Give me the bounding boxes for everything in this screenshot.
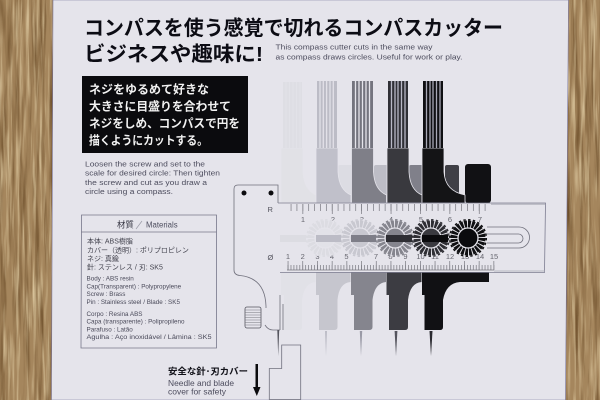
instruction box xyxy=(82,76,248,153)
ruler diameter scale: 10 xyxy=(416,252,425,261)
english instructions: scale for desired circle: Then tighten xyxy=(85,168,220,178)
ruler diameter scale: 14 xyxy=(476,252,484,261)
slot bar xyxy=(280,235,316,242)
english instructions xyxy=(85,160,220,196)
english tagline xyxy=(276,42,462,62)
panel: materials: Pin : Stainless steel / Blade : SK5 xyxy=(86,299,180,306)
panel: materials: Screw : Brass xyxy=(86,291,125,298)
screw holes xyxy=(242,190,274,196)
ruler diameter scale: 15 xyxy=(490,252,498,261)
panel: materials: Materials xyxy=(146,220,178,230)
english instructions: the screw and cut as you draw a xyxy=(85,178,208,187)
ruler R scale: 2 xyxy=(331,215,335,224)
english instructions: circle using a compass. xyxy=(85,187,173,196)
ruler R scale: 5 xyxy=(419,215,423,224)
panel: materials: Body : ABS resin xyxy=(86,275,134,282)
panel: materials: Corpo : Resina ABS xyxy=(86,311,143,318)
top silhouettes: cutter upper body fading xyxy=(281,81,491,203)
behind tabs xyxy=(338,164,491,203)
ruler R scale: R xyxy=(268,205,274,214)
title xyxy=(84,16,503,66)
ruler diameter scale: 1 xyxy=(286,252,290,261)
ruler diameter scale: 4 xyxy=(330,252,334,261)
wheel stage 5 xyxy=(449,219,487,257)
ruler diameter scale: 3 xyxy=(315,252,319,261)
wheel stage 3 xyxy=(376,219,422,257)
title: ビジネスや趣味に! xyxy=(84,43,263,66)
ruler diameter scale: 12 xyxy=(446,252,454,261)
panel: materials: 材質 xyxy=(117,220,134,230)
ruler R scale: 1 xyxy=(301,215,305,224)
panel: materials: ネジ: 真鍮 xyxy=(87,254,119,263)
panel: materials xyxy=(81,215,216,348)
title: コンパスを使う感覚で切れるコンパスカッター xyxy=(84,16,503,40)
wheel stage 4 xyxy=(412,219,450,257)
ruler R scale: 3 xyxy=(360,215,364,224)
english instructions: Loosen the screw and set to the xyxy=(85,160,205,168)
safety cover outline xyxy=(269,345,301,400)
safety cover label xyxy=(168,366,248,396)
ruler diameter scale: 5 xyxy=(344,252,349,261)
bottom silhouettes: cutter lower body fading xyxy=(281,272,489,330)
ruler R scale: 7 xyxy=(478,215,482,224)
english tagline: This compass cutter cuts in the same way xyxy=(276,42,433,52)
ruler diameter scale: 8 xyxy=(388,252,393,261)
panel: materials: 針: ステンレス / 刃: SK5 xyxy=(87,262,163,272)
wheel stage 2 xyxy=(341,219,386,257)
ruler diameter scale: 11 xyxy=(431,252,439,261)
compass outline xyxy=(234,185,546,330)
safety cover label: cover for safety xyxy=(168,388,226,396)
ruler R scale xyxy=(268,205,487,224)
knob screw xyxy=(245,307,261,328)
safety cover label: 安全な針･刃カバー xyxy=(168,366,248,376)
ruler diameter scale: 9 xyxy=(403,252,408,261)
needles xyxy=(325,331,432,356)
instruction box: ネジをゆるめて好きな xyxy=(89,82,209,96)
needle pin xyxy=(277,330,279,356)
ruler R scale: 4 xyxy=(389,215,393,224)
safety cover label: Needle and blade xyxy=(168,379,235,388)
rule highlight lines xyxy=(491,204,545,271)
panel: materials: Parafuso : Latão xyxy=(86,326,133,333)
panel: materials: カバー（透明）: ポリプロピレン xyxy=(87,246,189,254)
ruler diameter scale: 7 xyxy=(374,252,378,261)
stages xyxy=(281,148,465,203)
english tagline: as compass draws circles. Useful for work or play. xyxy=(276,52,462,62)
instruction box: ネジをしめ、コンパスで円を xyxy=(89,116,240,130)
panel: materials: Cap(Transparent) : Polypropylene xyxy=(86,283,182,290)
ruler diameter scale: 13 xyxy=(461,252,469,261)
panel: materials: Capa (transparente) : Polipropileno xyxy=(86,318,185,326)
ruler diameter scale xyxy=(268,252,498,270)
arrow: down xyxy=(253,364,260,396)
wheel stage 1 xyxy=(306,219,351,257)
instruction box: 大きさに目盛りを合わせて xyxy=(89,100,231,114)
knurled grips xyxy=(283,81,443,148)
ruler diameter scale: Ø xyxy=(268,253,274,262)
panel: materials: Agulha : Aço inoxidável / Lâmina : SK5 xyxy=(86,334,212,341)
ruler R scale: 6 xyxy=(448,215,452,224)
ruler diameter scale: 2 xyxy=(301,252,305,261)
instruction box: 描くようにカットする。 xyxy=(89,134,208,148)
panel: materials: 本体: ABS樹脂 xyxy=(87,236,133,246)
